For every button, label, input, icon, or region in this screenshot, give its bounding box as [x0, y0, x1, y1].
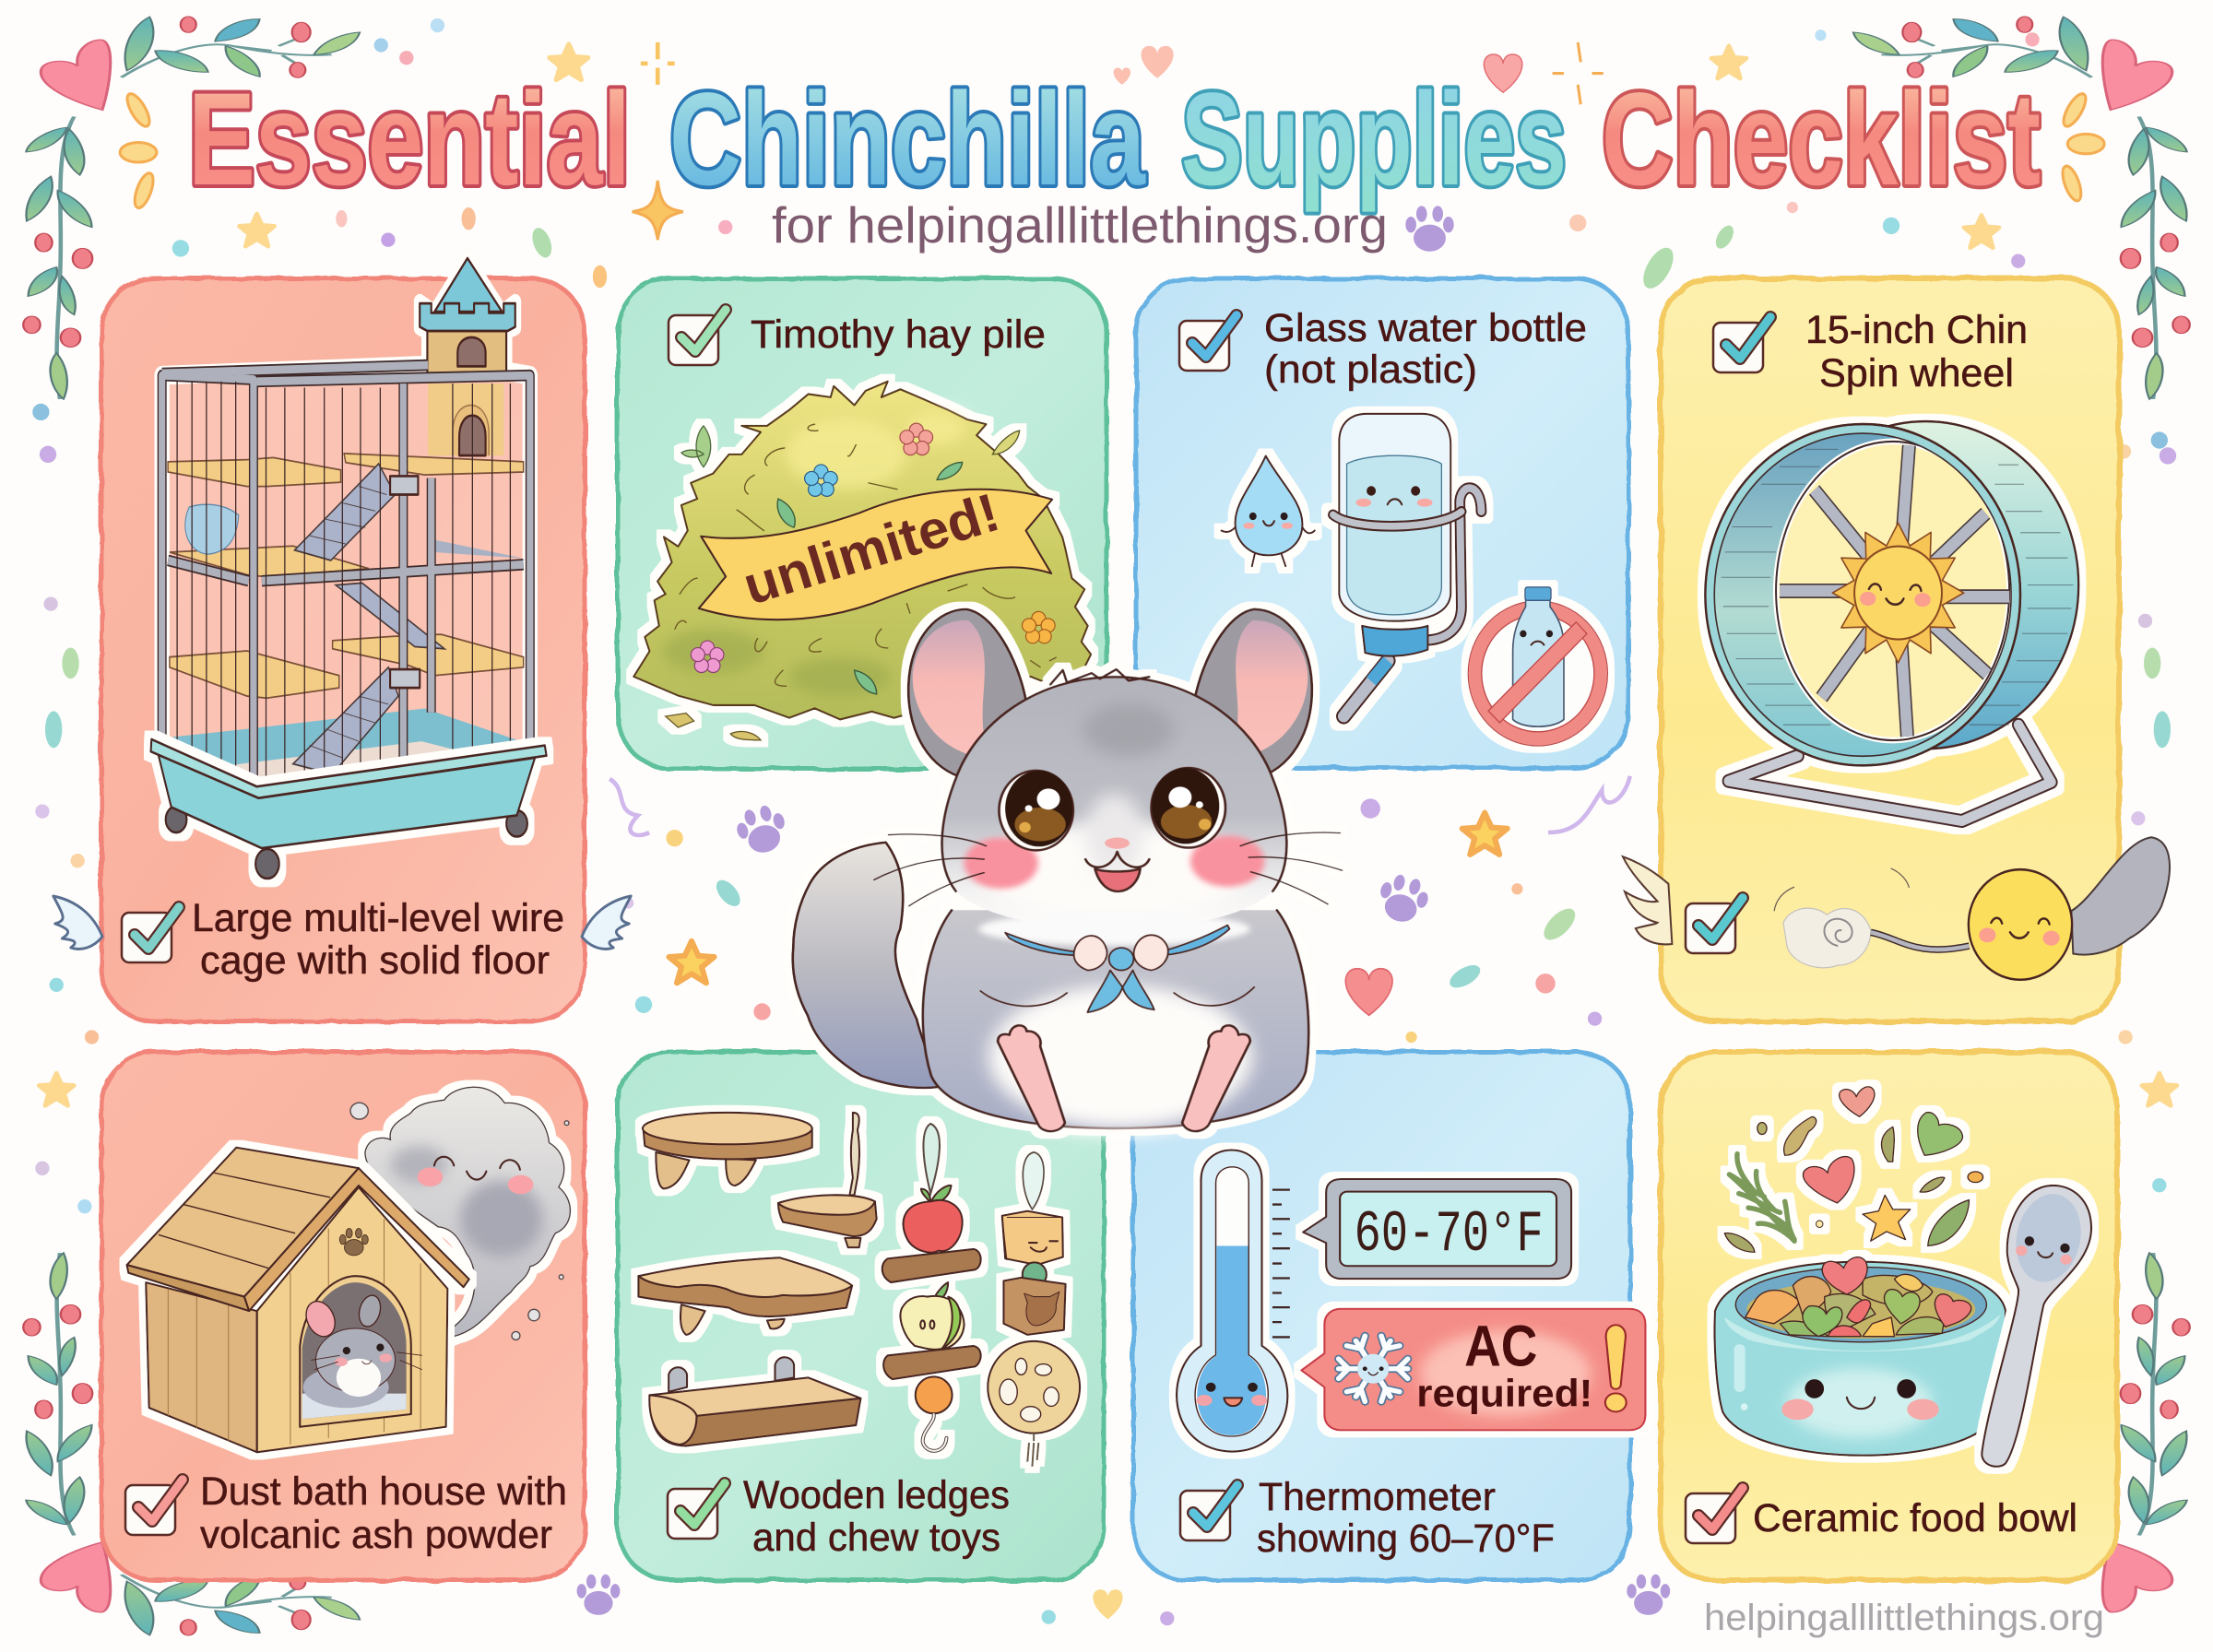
food [1746, 1257, 1971, 1337]
left ear [908, 609, 1034, 778]
smiling yellow ball [1969, 869, 2072, 980]
digital display 60-70F [1303, 1179, 1571, 1279]
label dust: volcanic ash powder [200, 1513, 552, 1557]
label cage: cage with solid floor [200, 938, 550, 983]
water drop character [1222, 456, 1315, 566]
right foot [1182, 1025, 1250, 1131]
water bottle illustration [1333, 414, 1481, 716]
left foot [998, 1025, 1065, 1131]
thermometer scale ticks [1272, 1190, 1290, 1337]
cage illustration [151, 258, 547, 879]
decorative corner vine bottom left [23, 1253, 360, 1635]
label wheel: Spin wheel [1819, 351, 2014, 395]
wing left [53, 896, 102, 950]
ribbon [699, 490, 1052, 620]
label thermometer [1257, 1475, 1555, 1561]
panel: hay [618, 278, 1106, 769]
label wheel: 15-inch Chin [1805, 308, 2028, 352]
chinchilla mascot [793, 609, 1343, 1131]
flowers [691, 423, 1055, 694]
dust bath house illustration [127, 1148, 469, 1452]
AC required callout [1301, 1309, 1645, 1430]
title: Checklist [1602, 66, 2041, 213]
cheeks [964, 835, 1264, 889]
label bowl: Ceramic food bowl [1753, 1496, 2077, 1540]
label water [1264, 306, 1587, 392]
smiling spoon [1982, 1186, 2091, 1467]
tail [793, 843, 940, 1088]
snowflake [1339, 1336, 1408, 1401]
panel: thermometer [1133, 1052, 1645, 1580]
title [188, 66, 2041, 213]
label dust: Dust bath house with [200, 1469, 567, 1514]
label hay: Timothy hay pile [751, 313, 1046, 357]
panel: food bowl [1661, 1052, 2117, 1580]
label wheel [1805, 308, 2028, 395]
chew toy with blocks [988, 1152, 1080, 1467]
label ledges [743, 1473, 1010, 1560]
checkbox hay [669, 310, 726, 365]
fluff ball [185, 504, 239, 554]
paws holding bandana [1074, 935, 1168, 970]
paw mark [339, 1229, 368, 1256]
checkbox thermometer [1180, 1485, 1237, 1540]
subtitle: for helpingalllittlethings.org [772, 196, 1388, 254]
checkbox bowl [1686, 1488, 1743, 1543]
frame [162, 365, 530, 783]
label dust [200, 1469, 567, 1557]
thermometer illustration [1177, 1150, 1287, 1452]
title: Essential [188, 66, 631, 213]
bandana [1005, 926, 1229, 1012]
label thermometer: Thermometer [1259, 1475, 1496, 1519]
smiling bowl with food [1714, 1257, 2006, 1456]
label thermometer: showing 60–70°F [1257, 1516, 1555, 1561]
panel: wheel [1623, 278, 2170, 1021]
label water: Glass water bottle [1264, 306, 1587, 350]
whiskers [873, 832, 1343, 906]
label ledges: Wooden ledges [743, 1473, 1010, 1517]
ramps [293, 464, 444, 774]
label ledges: and chew toys [752, 1516, 1000, 1560]
grey wing right [2071, 837, 2170, 955]
right ear [1187, 609, 1312, 778]
checkbox dust [125, 1480, 183, 1535]
decorative corner vine top right [1853, 17, 2190, 399]
floating food pieces [1724, 1087, 1983, 1252]
body [923, 910, 1308, 1128]
mini chinchilla [301, 1293, 422, 1408]
wing right [582, 896, 631, 950]
label cage: Large multi-level wire [192, 896, 564, 940]
no plastic sign [1468, 587, 1607, 746]
ribbon text: unlimited! [737, 482, 1006, 617]
dust puff and string [1774, 868, 1970, 968]
dust cloud character [365, 1087, 570, 1357]
checkbox ledges [668, 1483, 725, 1539]
panel: water bottle [1136, 278, 1628, 768]
footer url: helpingalllittlethings.org [1704, 1598, 2104, 1638]
panel: cage [53, 258, 631, 1021]
panel: ledges [618, 1052, 1104, 1580]
head [941, 669, 1286, 946]
dust specks [350, 1103, 569, 1339]
nose and mouth [1085, 837, 1149, 891]
tub and wheels [151, 739, 547, 879]
AC required callout: required! [1416, 1373, 1592, 1415]
decorative corner vine top left [23, 17, 360, 399]
label cage [192, 896, 564, 983]
castle tower [420, 258, 515, 455]
checkbox wheel [1713, 317, 1770, 372]
hay pile illustration [633, 382, 1091, 740]
checkbox cage [122, 907, 179, 962]
panel: dust bath [101, 1052, 585, 1580]
title: Supplies [1181, 66, 1567, 213]
checkbox water [1179, 315, 1237, 371]
digital display 60-70F: 60-70°F [1354, 1201, 1544, 1268]
levels [168, 454, 524, 698]
chew toy with fruit [882, 1124, 981, 1451]
checkbox bottom [1686, 898, 1743, 953]
exercise wheel illustration [1705, 421, 2078, 821]
AC required callout: AC [1464, 1314, 1537, 1378]
title: Chinchilla [669, 66, 1146, 213]
label water: (not plastic) [1264, 348, 1477, 392]
eyes [999, 768, 1225, 850]
wooden ledges [638, 1113, 877, 1446]
wing left of wheel checkbox [1623, 856, 1672, 944]
decorative corner vine bottom right [2102, 1253, 2190, 1612]
